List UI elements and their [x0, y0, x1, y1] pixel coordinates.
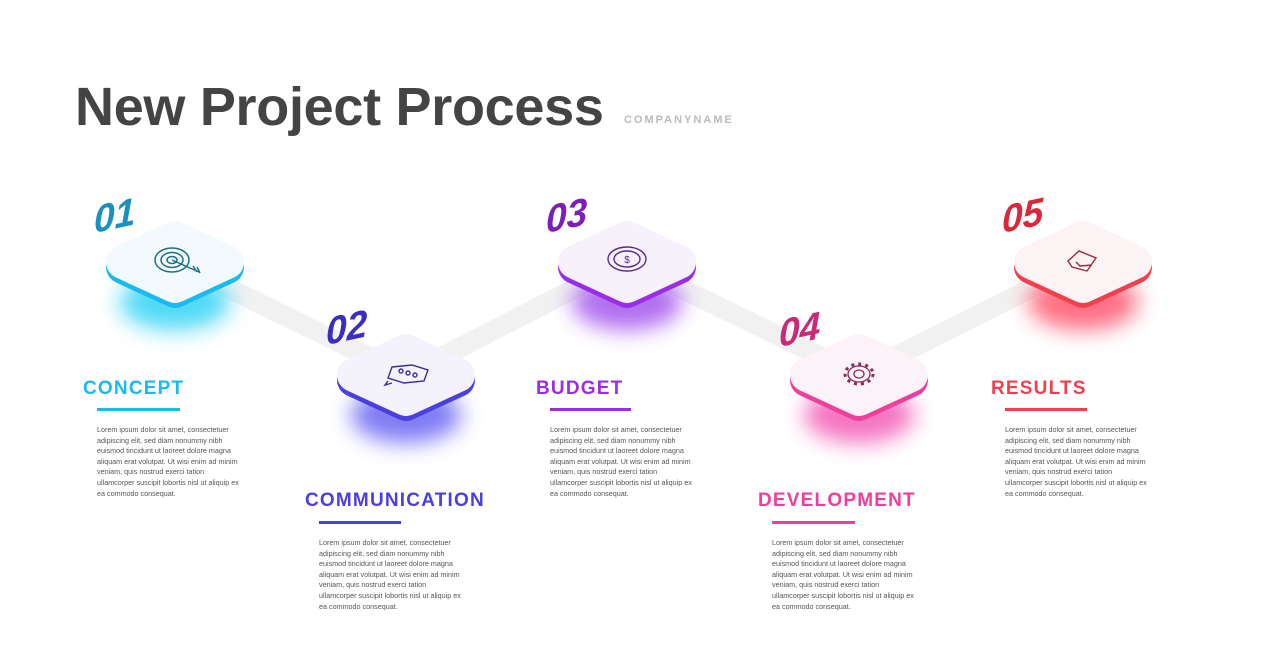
step 3 text [536, 378, 692, 498]
step 4 text [758, 490, 916, 611]
step 5 text: Lorem ipsum dolor sit amet, consectetuer adipiscing elit, sed diam nonummy nibh euismod tincidunt ut laoreet dolore magna aliquam erat volutpat. Ut wisi enim ad minim veniam, quis nostrud exerci tation ullamcorper suscipit lobortis nisl ut aliquip ex ea commodo consequat. [1005, 425, 1147, 498]
step 5 text: RESULTS [991, 378, 1087, 399]
step 1 text: Lorem ipsum dolor sit amet, consectetuer adipiscing elit, sed diam nonummy nibh euismod tincidunt ut laoreet dolore magna aliquam erat volutpat. Ut wisi enim ad minim veniam, quis nostrud exerci tation ullamcorper suscipit lobortis nisl ut aliquip ex ea commodo consequat. [97, 425, 239, 498]
icon: chat [385, 365, 428, 385]
step 1 text [83, 378, 239, 498]
step 1 text: CONCEPT [83, 378, 184, 399]
numbers: 02 [326, 302, 367, 354]
icon: check box [1068, 251, 1096, 271]
numbers [94, 190, 1044, 356]
step 2 text: COMMUNICATION [305, 490, 485, 511]
numbers: 04 [779, 304, 820, 356]
step 3 text: BUDGET [536, 378, 623, 399]
company name: COMPANYNAME [624, 114, 734, 126]
step 3 text: Lorem ipsum dolor sit amet, consectetuer adipiscing elit, sed diam nonummy nibh euismod tincidunt ut laoreet dolore magna aliquam erat volutpat. Ut wisi enim ad minim veniam, quis nostrud exerci tation ullamcorper suscipit lobortis nisl ut aliquip ex ea commodo consequat. [550, 425, 692, 498]
icon: coin: $ [624, 255, 630, 266]
step 4 text: Lorem ipsum dolor sit amet, consectetuer adipiscing elit, sed diam nonummy nibh euismod tincidunt ut laoreet dolore magna aliquam erat volutpat. Ut wisi enim ad minim veniam, quis nostrud exerci tation ullamcorper suscipit lobortis nisl ut aliquip ex ea commodo consequat. [772, 538, 914, 611]
step 5 text [991, 378, 1147, 498]
node 4 [804, 351, 914, 443]
node 2 [351, 351, 461, 443]
icon: gear [845, 364, 873, 384]
step 2 text [305, 490, 485, 611]
connector lines [175, 262, 1083, 375]
step 2 text: Lorem ipsum dolor sit amet, consectetuer adipiscing elit, sed diam nonummy nibh euismod tincidunt ut laoreet dolore magna aliquam erat volutpat. Ut wisi enim ad minim veniam, quis nostrud exerci tation ullamcorper suscipit lobortis nisl ut aliquip ex ea commodo consequat. [319, 538, 461, 611]
node 1 [120, 238, 230, 330]
step 4 text: DEVELOPMENT [758, 490, 916, 511]
icon: target [155, 248, 200, 273]
title: New Project Process [75, 77, 604, 137]
numbers: 05 [1002, 190, 1044, 242]
numbers: 03 [546, 190, 587, 242]
numbers: 01 [94, 190, 135, 242]
node 5 [1028, 238, 1138, 330]
node 3 [572, 238, 682, 330]
